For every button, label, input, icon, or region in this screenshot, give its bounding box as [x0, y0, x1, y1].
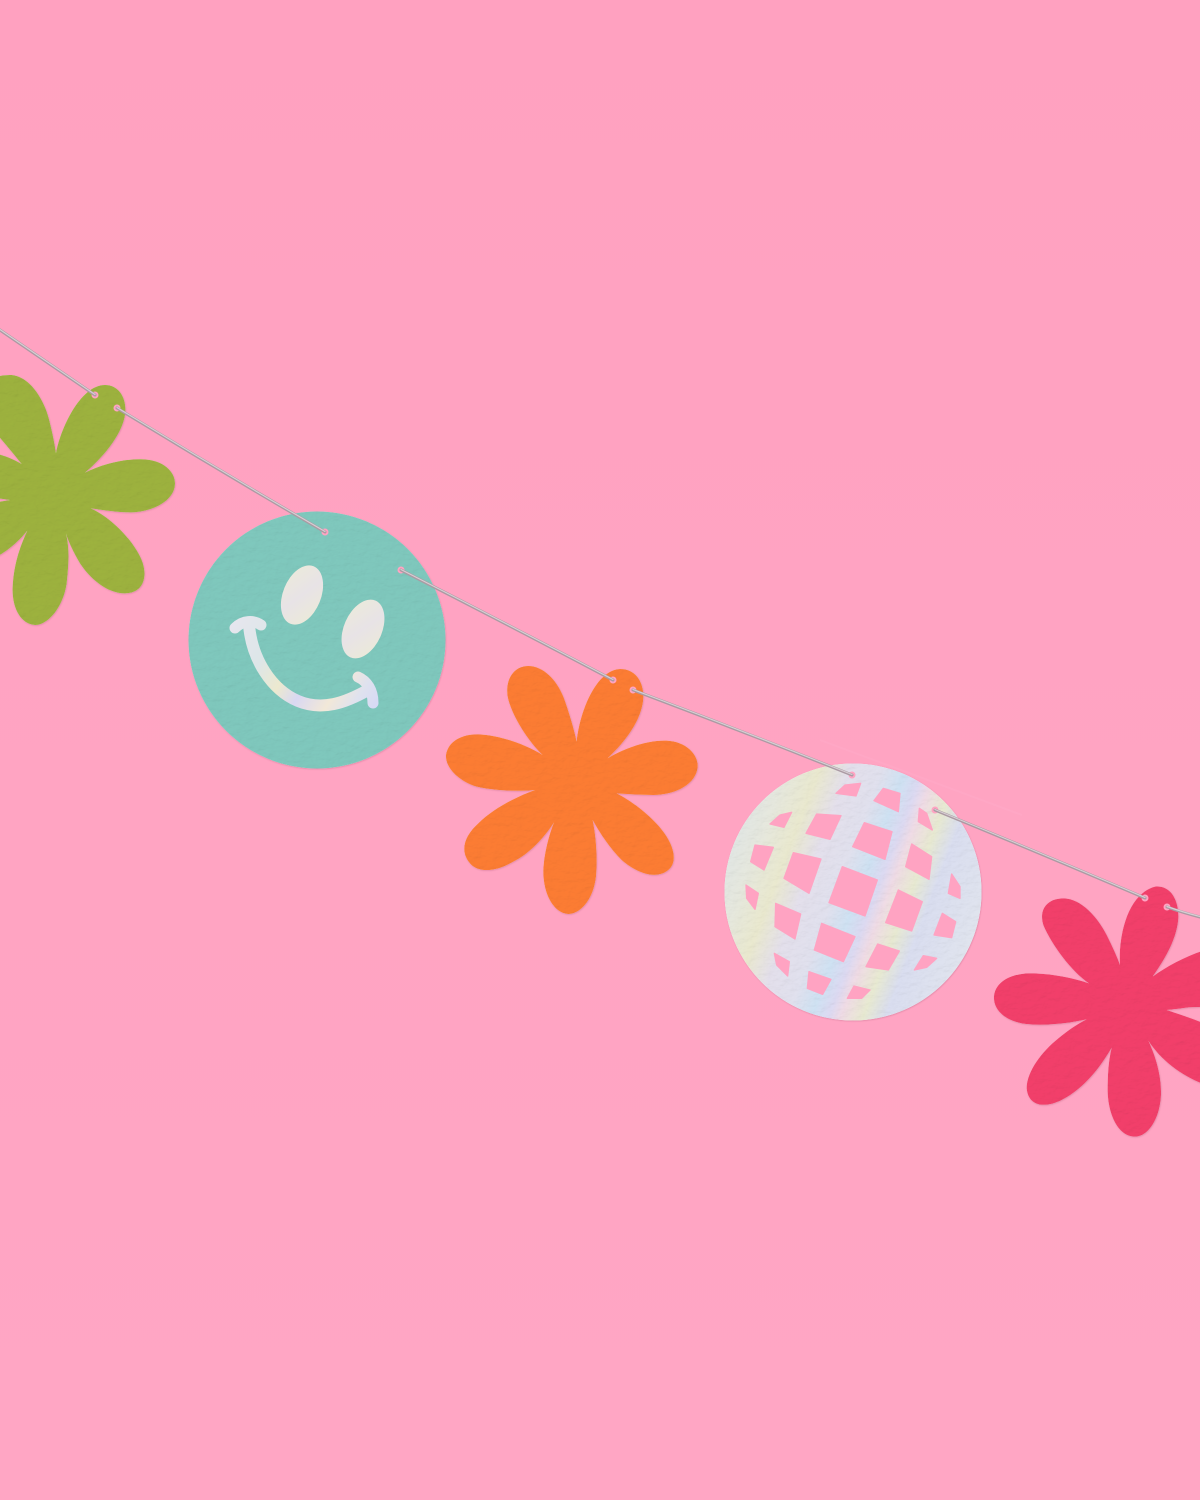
garland string — [0, 330, 1200, 917]
holographic disco ball — [724, 764, 982, 1020]
disco ball cut-out windows — [746, 783, 960, 998]
red flower — [994, 887, 1200, 1137]
smile — [235, 622, 373, 705]
smiley left eye — [273, 559, 331, 631]
orange flower — [446, 666, 698, 914]
smiley face disc — [188, 512, 446, 768]
faint light streak — [820, 740, 1022, 815]
smiley right eye — [333, 593, 393, 665]
string threading holes — [92, 392, 1170, 910]
green flower — [0, 375, 175, 625]
